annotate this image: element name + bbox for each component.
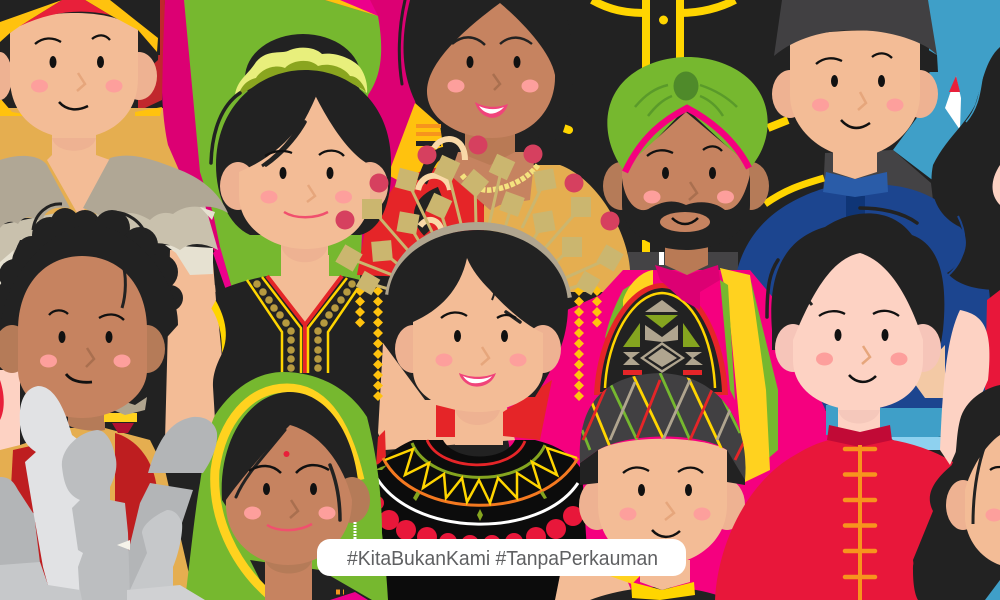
person: woman with green veil and bindi, bottom (185, 372, 388, 600)
face features (244, 451, 336, 530)
leaf crown (235, 48, 367, 97)
zigzag dress (368, 440, 590, 600)
jacket and neck (0, 428, 195, 600)
face features (31, 35, 122, 109)
hair (403, 0, 573, 140)
turban jewel and folds (674, 72, 698, 100)
person: man with curly hair, left (0, 204, 195, 600)
arm (165, 285, 230, 440)
arm (555, 575, 635, 600)
neck (281, 240, 328, 276)
hair (771, 213, 944, 350)
neck (465, 132, 515, 165)
striped dress strap (388, 103, 445, 195)
turban (607, 57, 768, 172)
dress (357, 160, 490, 280)
face features (40, 310, 130, 382)
person: woman with leaf crown and black embroidered dress (165, 34, 395, 470)
neckline embroidery (247, 255, 358, 373)
red collar pieces (376, 430, 386, 465)
hat red side (138, 0, 165, 108)
person: man with woven hat, bottom centre (555, 373, 746, 600)
turban band (625, 108, 749, 172)
red beads (336, 136, 620, 230)
ears (395, 325, 431, 373)
collar (823, 172, 888, 197)
woven hat (580, 373, 746, 480)
robe (500, 270, 830, 600)
feathers: silver plant leaves, bottom left (0, 386, 217, 600)
hair (388, 230, 568, 397)
crown arc (389, 226, 568, 298)
person: woman with long hair and peach arm, bottom right (913, 290, 1000, 600)
hair (222, 392, 362, 520)
face (622, 112, 749, 250)
red garment (985, 290, 1000, 392)
robe (590, 587, 732, 600)
pink neckline and beads (330, 592, 368, 600)
face (226, 425, 352, 565)
ears (775, 324, 811, 372)
person: man in blue jacket and grey hat (733, 0, 990, 410)
yellow collar (610, 576, 640, 584)
face features (644, 146, 734, 204)
face features (620, 467, 710, 537)
hanging diamonds (355, 286, 602, 401)
person: woman with wavy hair, far right top (931, 47, 1000, 290)
veil (185, 372, 388, 600)
decor: yellow frame lines on black panel (541, 0, 824, 252)
neck (833, 150, 877, 179)
person: woman with dark hair, top centre (357, 0, 630, 292)
jacket (733, 185, 990, 410)
face (427, 3, 555, 138)
face features (816, 311, 908, 382)
feather cape right (83, 156, 228, 275)
hashtag caption text: #KitaBukanKami #TanpaPerkauman (347, 548, 658, 570)
headband (0, 0, 158, 52)
grey band behind turban man (628, 252, 738, 276)
necklace ornament (104, 397, 147, 433)
shoulders (378, 343, 515, 450)
ears (603, 162, 639, 210)
face (793, 253, 923, 410)
collar (827, 425, 892, 447)
ears and hair (773, 45, 790, 70)
ears (0, 325, 30, 373)
dress (213, 276, 395, 470)
person: woman with feather crown and zigzag dress, centre (335, 136, 624, 600)
chest and neck (47, 135, 110, 218)
face (965, 435, 1000, 565)
neck (838, 405, 880, 435)
hat back (0, 0, 160, 60)
neck (640, 560, 690, 590)
ear (334, 477, 370, 523)
ears (220, 162, 256, 210)
face (239, 95, 370, 249)
bun (245, 34, 361, 122)
arm (165, 250, 216, 440)
beard (622, 175, 750, 250)
face (790, 31, 920, 157)
hair (913, 385, 1000, 600)
pearl necklace (462, 165, 538, 190)
face (413, 258, 543, 412)
blue panels behind (826, 345, 945, 450)
ear (946, 480, 980, 530)
frog buttons (845, 445, 875, 600)
person: man in green turban with beard (500, 57, 830, 600)
face (598, 439, 727, 565)
peach shoulder of hidden person (0, 370, 20, 450)
hair back (216, 70, 391, 235)
collar (655, 265, 720, 310)
earring (354, 522, 356, 540)
neck (455, 405, 503, 445)
patterned shield (594, 283, 728, 395)
collar yellow (0, 98, 162, 116)
face features (260, 151, 352, 217)
veil border (215, 388, 360, 600)
neck (665, 245, 708, 275)
person: man with yellow headband and feather cape, top left (0, 0, 228, 440)
blue garment (985, 580, 1000, 600)
crown spokes and squares (335, 136, 624, 295)
person: man in red cheongsam, right (715, 208, 953, 600)
face (18, 256, 147, 418)
face features (812, 53, 904, 128)
ears (0, 52, 12, 100)
face features (448, 37, 538, 118)
hat (774, 0, 937, 56)
cream hair rings (418, 139, 465, 232)
feather cape left (0, 156, 70, 285)
red robe (715, 437, 953, 600)
black braid behind rings (419, 152, 452, 232)
face (10, 13, 138, 138)
ears (579, 480, 615, 530)
caption pill (317, 539, 686, 576)
curly hair (0, 208, 183, 345)
arm (940, 310, 989, 465)
neck (265, 555, 312, 600)
face features (436, 312, 526, 387)
backdrop: magenta and green cloth (162, 0, 417, 292)
